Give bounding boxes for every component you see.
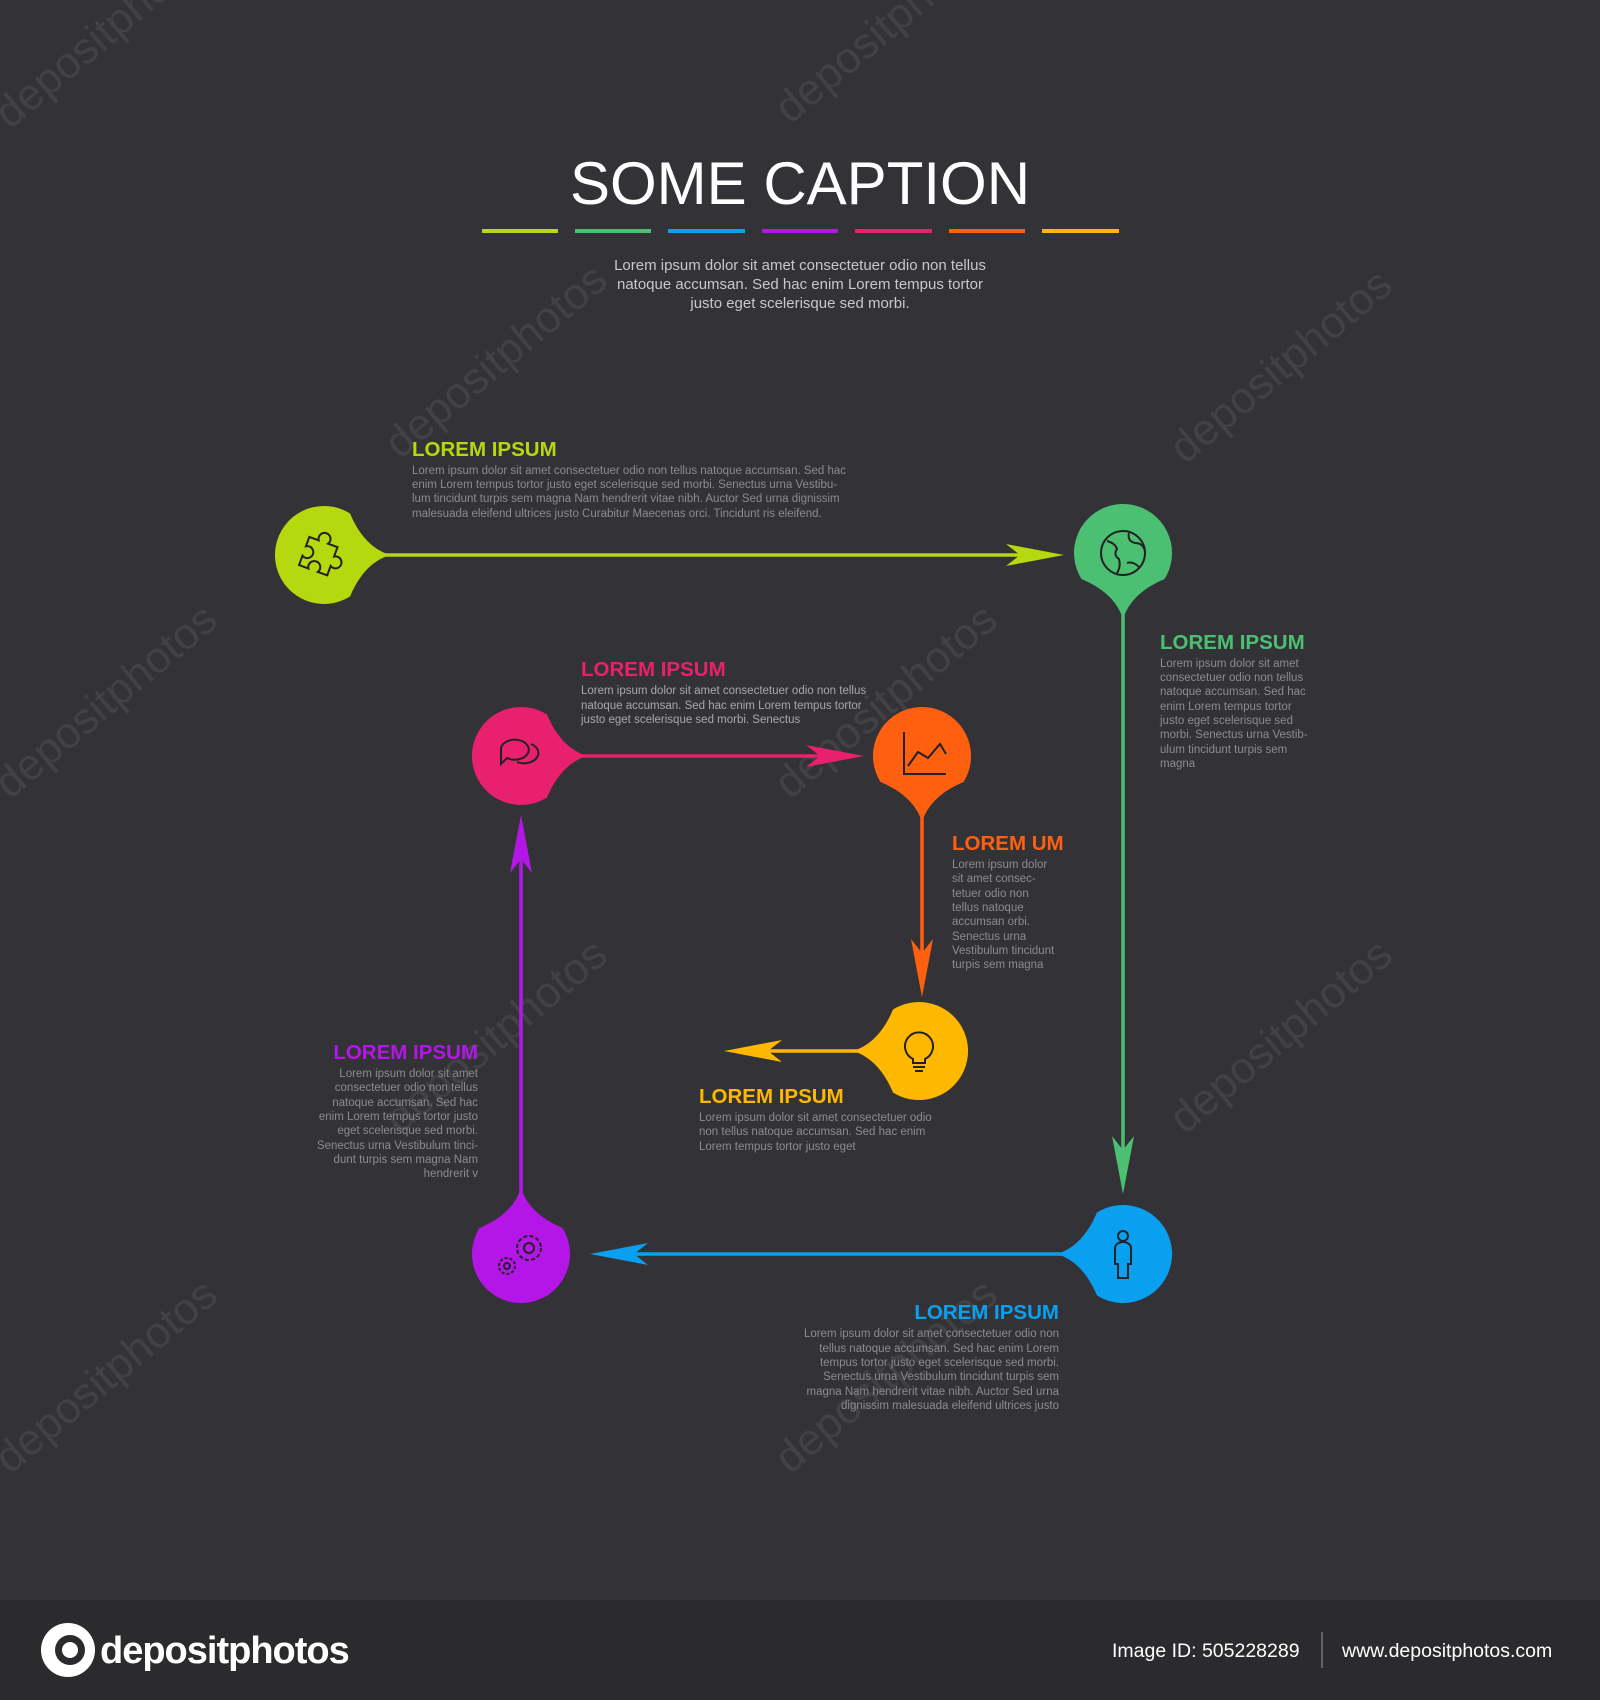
footer: depositphotos <box>100 1630 349 1672</box>
text: pink: natoque accumsan. Sed hac enim Lorem tempus tortor <box>581 700 862 712</box>
subtitle <box>614 257 986 312</box>
text: orange <box>952 832 1064 971</box>
text: purple: LOREM IPSUM <box>333 1041 478 1064</box>
text: green: consectetuer odio non tellus <box>1160 672 1303 684</box>
node: pink chat <box>472 707 587 805</box>
text: pink: justo eget scelerisque sed morbi. Senectus <box>580 714 801 726</box>
text: lime: malesuada eleifend ultrices justo Curabitur Maecenas orci. Tincidunt ris eleifend. <box>412 508 822 520</box>
text: purple <box>317 1041 479 1180</box>
text: green: ulum tincidunt turpis sem <box>1160 744 1287 756</box>
title: SOME CAPTION <box>570 150 1030 217</box>
text: orange: Lorem ipsum dolor <box>952 859 1047 871</box>
text: green: enim Lorem tempus tortor <box>1160 701 1292 713</box>
text: orange: turpis sem magna <box>952 959 1044 971</box>
text: orange: accumsan orbi. <box>952 916 1030 928</box>
color underline <box>482 229 1119 233</box>
text: yellow: non tellus natoque accumsan. Sed hac enim <box>699 1126 925 1138</box>
text: green: morbi. Senectus urna Vestib- <box>1160 729 1308 741</box>
text: purple: consectetuer odio non tellus <box>335 1082 478 1094</box>
text: purple: hendrerit v <box>424 1168 478 1180</box>
watermarks: depositphotos <box>765 594 1006 808</box>
text: purple: enim Lorem tempus tortor justo <box>319 1111 478 1123</box>
text: purple: Senectus urna Vestibulum tinci- <box>317 1140 478 1152</box>
node: green globe <box>1074 504 1172 619</box>
text: purple: eget scelerisque sed morbi. <box>337 1125 478 1137</box>
text: blue: tellus natoque accumsan. Sed hac enim Lorem <box>819 1343 1059 1355</box>
subtitle: Lorem ipsum dolor sit amet consectetuer odio non tellus <box>614 257 986 274</box>
text: blue: Lorem ipsum dolor sit amet consectetuer odio non <box>804 1328 1059 1340</box>
text: yellow: Lorem ipsum dolor sit amet consectetuer odio <box>699 1112 932 1124</box>
node: lime puzzle <box>275 506 390 604</box>
text: orange: tetuer odio non <box>952 888 1029 900</box>
text: lime: lum tincidunt turpis sem magna Nam hendrerit vitae nibh. Auctor Sed urna dignissim <box>412 493 840 505</box>
text: orange: Senectus urna <box>952 931 1027 943</box>
node: purple gears <box>472 1188 570 1303</box>
text: green: justo eget scelerisque sed <box>1159 715 1293 727</box>
watermarks: depositphotos <box>1160 929 1401 1143</box>
watermarks: depositphotos <box>375 929 616 1143</box>
watermarks: depositphotos <box>375 254 616 468</box>
text: blue: tempus tortor justo eget scelerisque sed morbi. <box>820 1357 1059 1369</box>
subtitle: natoque accumsan. Sed hac enim Lorem tempus tortor <box>617 276 983 293</box>
text: pink: LOREM IPSUM <box>581 658 726 681</box>
text: lime: enim Lorem tempus tortor justo eget scelerisque sed morbi. Senectus urna Vestibu- <box>412 479 837 491</box>
subtitle: justo eget scelerisque sed morbi. <box>689 295 910 312</box>
node: blue person <box>1057 1205 1172 1303</box>
text: lime <box>412 438 846 520</box>
text: green: natoque accumsan. Sed hac <box>1160 686 1306 698</box>
watermarks: depositphotos <box>1160 259 1401 473</box>
text: orange: sit amet consec- <box>952 873 1036 885</box>
text: green: LOREM IPSUM <box>1160 631 1305 654</box>
text: yellow: Lorem tempus tortor justo eget <box>699 1141 856 1153</box>
text: pink: Lorem ipsum dolor sit amet consectetuer odio non tellus <box>581 685 866 697</box>
footer <box>0 1600 1600 1700</box>
text: blue: dignissim malesuada eleifend ultrices justo <box>841 1400 1059 1412</box>
text: lime: Lorem ipsum dolor sit amet consectetuer odio non tellus natoque accumsan. Sed hac <box>412 465 846 477</box>
text: lime: LOREM IPSUM <box>412 438 557 461</box>
watermarks <box>0 0 1401 1483</box>
text: orange: LOREM UM <box>952 832 1064 855</box>
text: orange: tellus natoque <box>952 902 1024 914</box>
text: blue: magna Nam hendrerit vitae nibh. Auctor Sed urna <box>806 1386 1060 1398</box>
text: blue <box>804 1301 1060 1412</box>
watermarks: depositphotos <box>765 1269 1006 1483</box>
text: purple: Lorem ipsum dolor sit amet <box>339 1068 479 1080</box>
text: green <box>1159 631 1308 770</box>
text: purple: dunt turpis sem magna Nam <box>334 1154 478 1166</box>
footer: www.depositphotos.com <box>1341 1640 1552 1662</box>
text: green: Lorem ipsum dolor sit amet <box>1160 658 1299 670</box>
node: orange chart <box>873 707 971 822</box>
text: orange: Vestibulum tincidunt <box>952 945 1055 957</box>
text: purple: natoque accumsan. Sed hac <box>332 1097 478 1109</box>
text: blue: Senectus urna Vestibulum tincidunt turpis sem <box>823 1371 1059 1383</box>
footer: Image ID: 505228289 <box>1112 1640 1300 1662</box>
node: yellow bulb <box>853 1002 968 1100</box>
text: yellow: LOREM IPSUM <box>699 1085 844 1108</box>
connector lines <box>360 555 1123 1254</box>
text: pink <box>580 658 866 726</box>
arrowheads <box>1006 544 1064 566</box>
text: green: magna <box>1160 758 1196 770</box>
text: yellow <box>699 1085 932 1153</box>
text: blue: LOREM IPSUM <box>914 1301 1059 1324</box>
